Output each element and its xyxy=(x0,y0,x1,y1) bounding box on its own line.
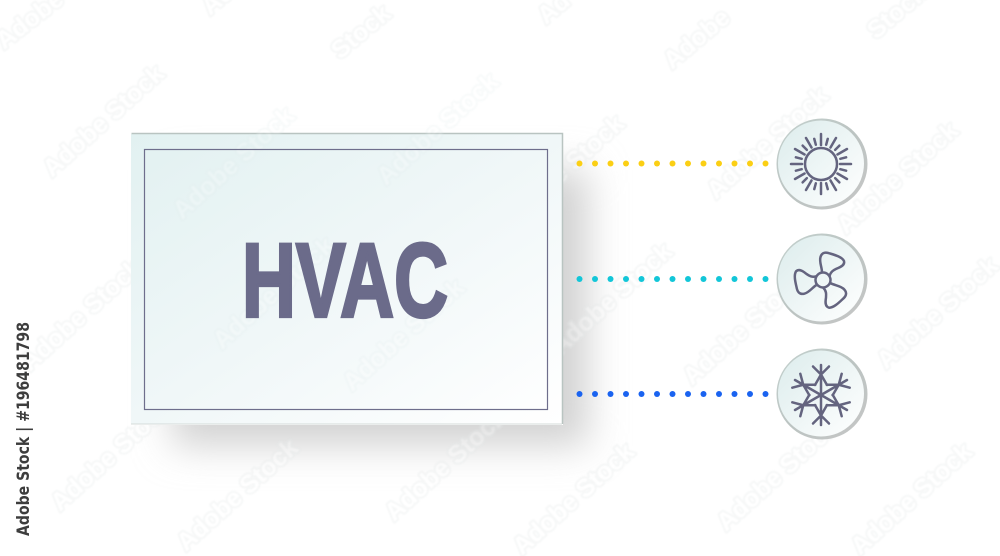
watermark pattern: Adobe Stock xyxy=(701,81,834,204)
watermark pattern: Adobe Stock xyxy=(45,393,178,516)
card shadow xyxy=(172,170,588,446)
watermark pattern: Adobe Stock xyxy=(711,413,844,536)
watermark pattern: Adobe Stock xyxy=(171,433,304,556)
watermark pattern: Adobe Stock xyxy=(15,253,148,376)
card watermark: Adobe Stock xyxy=(207,231,340,354)
card watermark: Adobe Stock xyxy=(371,67,504,190)
heading: HVAC: HVAC xyxy=(242,222,448,340)
card watermark xyxy=(167,67,504,396)
dotted connector: blue xyxy=(576,391,768,397)
watermark pattern: Adobe Stock xyxy=(677,267,810,390)
panel: HVAC card xyxy=(131,67,563,425)
stock id caption: Adobe Stock | #196481798 xyxy=(14,322,34,536)
watermark pattern: Adobe Stock xyxy=(831,116,964,239)
icon: sun xyxy=(776,118,868,210)
icon: fan xyxy=(776,234,868,324)
dotted connector: yellow xyxy=(576,160,768,166)
watermark pattern: Adobe Stock xyxy=(871,251,1000,374)
card watermark: Adobe Stock xyxy=(337,273,470,396)
card watermark: Adobe Stock xyxy=(167,101,300,224)
inner frame xyxy=(144,150,548,410)
watermark pattern: Adobe Stock xyxy=(379,403,512,526)
watermark pattern: Adobe Stock xyxy=(497,109,630,232)
icon: snowflake xyxy=(776,348,868,440)
watermark pattern: Stock xyxy=(326,0,396,65)
watermark pattern: Adobe xyxy=(658,3,736,75)
watermark pattern: Adobe Stock xyxy=(545,237,678,360)
watermark pattern: Adobe Stock xyxy=(37,59,170,182)
dotted connector: cyan xyxy=(576,276,768,282)
